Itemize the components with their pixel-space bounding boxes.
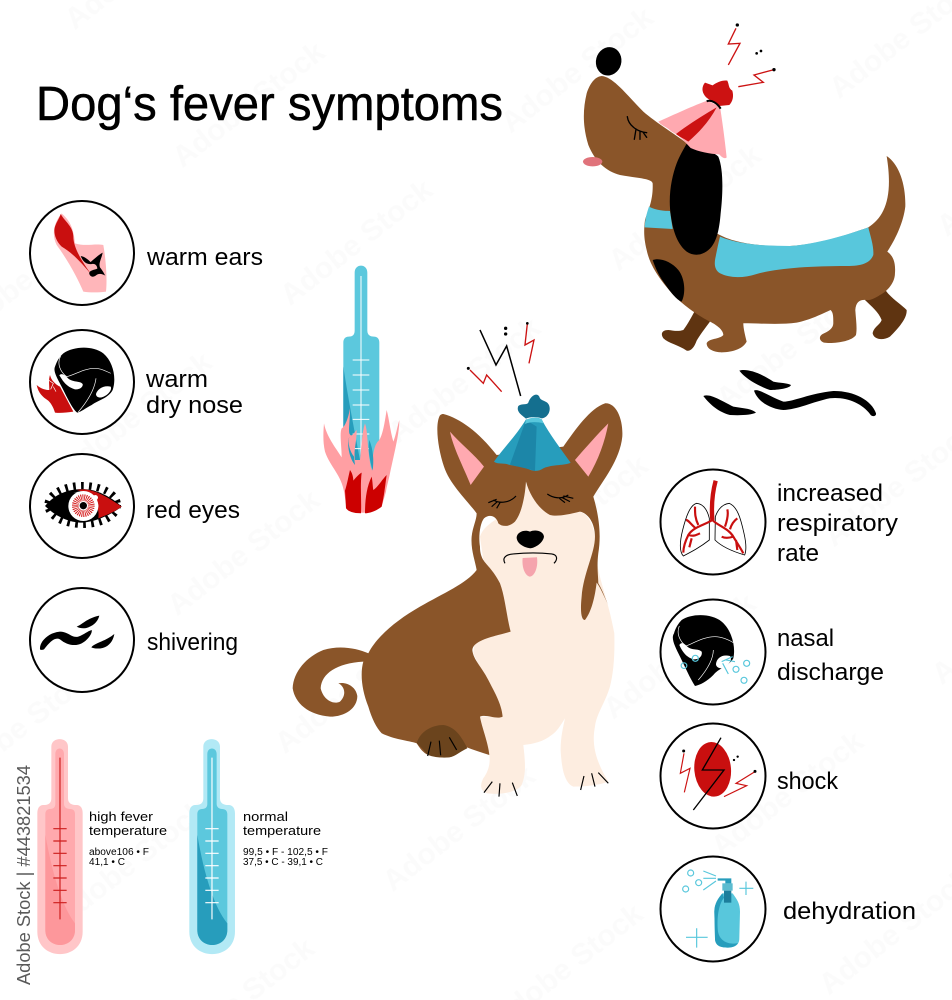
- label: shock: [777, 768, 839, 795]
- flame core: [345, 470, 387, 513]
- mouth: [504, 553, 557, 563]
- label: dehydration: [783, 898, 916, 925]
- symptom: shivering: [30, 588, 238, 692]
- icon: spray bottle: [683, 870, 753, 948]
- icon: shock bolts: [680, 738, 756, 810]
- symptom: dehydration: [660, 856, 916, 962]
- label: nasal: [777, 625, 834, 652]
- range celsius: 37,5 • C - 39,1 • C: [243, 857, 323, 868]
- hip spot: [653, 259, 684, 302]
- claws: [428, 737, 608, 797]
- inner ears: [450, 423, 608, 485]
- shiver marks: [703, 370, 876, 416]
- icon: warm ear: [54, 213, 107, 292]
- thermometer: [343, 266, 379, 473]
- label line two: dry nose: [146, 392, 243, 419]
- dark legs: [662, 287, 907, 351]
- symptom: warm ears: [30, 201, 263, 305]
- title: Dog‘s fever symptoms: [36, 78, 503, 131]
- symptom: increased respiratory rate: [660, 470, 898, 574]
- label line two: discharge: [777, 659, 884, 686]
- closed eye: [627, 117, 647, 139]
- symptom: red eyes: [30, 454, 240, 558]
- text: normal temperature: [243, 809, 328, 868]
- icon: hot nose: [37, 348, 114, 413]
- blue thermometer: normal: [189, 739, 235, 954]
- icon: shiver marks: [40, 616, 114, 650]
- thermometer in flames: [323, 266, 399, 513]
- text: high fever temperature: [89, 809, 167, 868]
- icon: lungs: [680, 481, 746, 556]
- range: 99,5 • F - 102,5 • F: [243, 847, 328, 858]
- flames: [323, 408, 399, 513]
- ear: [670, 143, 722, 255]
- blue flame tongues: [348, 437, 373, 471]
- label: red eyes: [146, 497, 240, 524]
- cream body: [473, 483, 614, 794]
- stock credit: Adobe Stock | #443821534: [14, 765, 34, 985]
- tongue: [522, 557, 537, 577]
- brown body and tail: [293, 560, 511, 757]
- text: high fever temperature: high fever: [89, 809, 154, 824]
- dog nose: [593, 44, 625, 78]
- saddle: [715, 227, 873, 277]
- label: shivering: [147, 629, 238, 656]
- label: warm ears: [146, 244, 263, 271]
- collar: [645, 207, 673, 229]
- text: normal temperature: normal: [243, 809, 288, 824]
- pain bolts: [467, 322, 534, 396]
- label: warm: [145, 366, 208, 393]
- dachshund with ice pack: [583, 23, 907, 416]
- corgi with ice pack: [293, 322, 622, 797]
- icon: runny nose: [673, 615, 750, 686]
- closed eyes: [488, 494, 573, 508]
- nose: [517, 531, 544, 548]
- pain bolts: [728, 23, 776, 87]
- ice pack: [658, 81, 733, 158]
- range: above106 • F: [89, 847, 149, 858]
- range celsius: 41,1 • C: [89, 857, 125, 868]
- symptom: shock: [660, 724, 839, 828]
- body: [584, 76, 905, 352]
- ice pack: [494, 395, 571, 471]
- tongue: [583, 157, 602, 166]
- brown head and ears: [437, 403, 622, 620]
- red thermometer: high fever: [37, 739, 83, 954]
- symptom: warm dry nose: [30, 330, 243, 434]
- knee: [417, 725, 467, 758]
- label: increased: [777, 480, 883, 507]
- label line three: rate: [777, 540, 819, 567]
- line two: temperature: [243, 823, 321, 838]
- icon: red eye: [45, 486, 122, 524]
- line two: temperature: [89, 823, 167, 838]
- label line two: respiratory: [777, 510, 898, 537]
- symptom: nasal discharge: [660, 600, 884, 704]
